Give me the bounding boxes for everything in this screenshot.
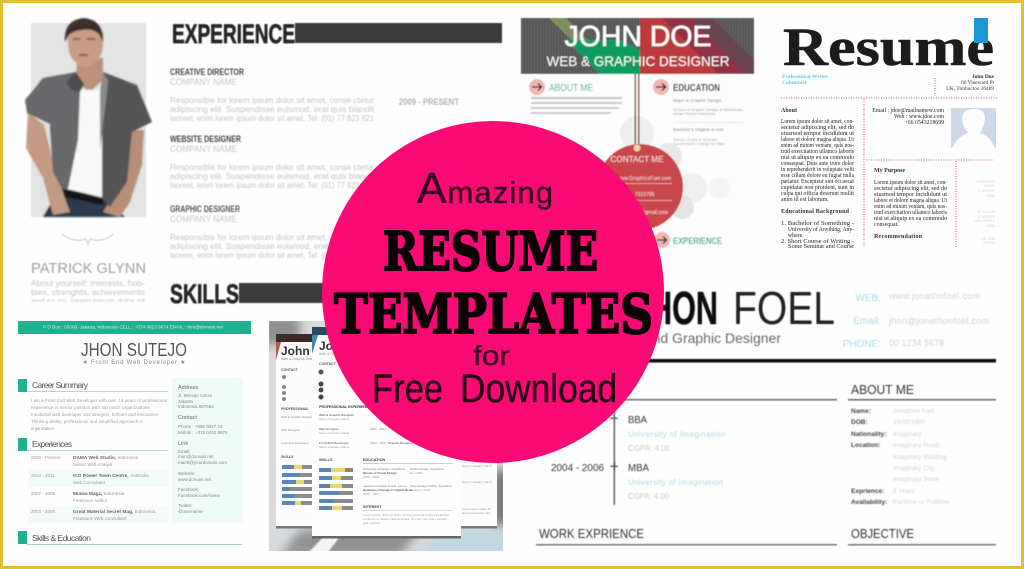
about column: University of Anything, Any- [788, 226, 854, 233]
side notes: RE MAJOR [977, 210, 995, 214]
about me: Name: [851, 408, 871, 415]
about column: eiusmod tempor incididunt ut [781, 131, 854, 137]
subtitle: Columnist [782, 80, 807, 86]
section: experiences: Freelance Web Consultant [73, 516, 127, 521]
experience entry: creative director [170, 67, 375, 123]
section: career summary: experience in senior position with top notch organizations. [31, 405, 151, 410]
photo: man in grey shirt [25, 18, 152, 217]
sidebar: address and links: Mobile : +372 0453 9876 [178, 430, 228, 435]
about column: trud exercitation ullamco laboris [781, 149, 855, 155]
contact block [946, 74, 995, 92]
education entry: BBA [628, 415, 725, 453]
contact block: 66 Vineward Pl [961, 80, 995, 86]
education block: Master of Visual Design [363, 471, 397, 475]
name: Jonathon Foel: FOEL [733, 282, 835, 334]
my purpose block: nisi ut aliquip ex ea commodo [874, 216, 947, 222]
side notes: WORK [984, 184, 996, 188]
contact links: www.jonathnfoel.com [888, 291, 980, 301]
sidebar: address and links: Facebook: [178, 487, 199, 492]
section: experiences: Experiences [32, 439, 72, 449]
sidebar: address and links: @username [178, 509, 203, 514]
section: experiences: DAMA Web Studio, Indonesia [73, 455, 139, 461]
back sheet: PROFESSIONAL [281, 407, 309, 411]
about me section [529, 79, 622, 114]
front sheet: Graphic Designer [388, 441, 414, 445]
sidebar: address and links: Jakarta [178, 399, 193, 404]
about column: pariatur. Excepteur sint occaecat [781, 179, 854, 185]
about text: bies, strenghts, achievements [31, 288, 145, 297]
sidebar: address and links: Phone : +966 0047 23 [178, 424, 223, 429]
heading bar: Experience [172, 19, 502, 49]
ornament [62, 234, 113, 244]
heading bar: Skills: SKILLS [170, 279, 239, 309]
experience entry: graphic designer: COMPANY NAME [170, 214, 237, 224]
education block: EDUCATION [363, 458, 386, 462]
headline: Templates: TEMPLATES [334, 282, 653, 346]
back sheet right notes: Some Company Name [462, 464, 493, 468]
education block: Course in 2006 [410, 488, 431, 492]
about column: 2. Short Course of Writing - [781, 238, 854, 245]
back sheet right notes: amet consectetur elit [462, 511, 490, 515]
sidebar: address and links: Facebook.com/name [178, 493, 221, 498]
email block: Web : www.jdoe.com [894, 114, 944, 120]
experience entry: graphic designer: GRAPHIC DESIGNER [170, 204, 240, 214]
section: experiences: Great Material Secret Mag, Indonesia [73, 509, 156, 515]
experience entry: graphic designer: Responsible for lorem ipsum dolor sit amet, conse ctetur [170, 233, 374, 242]
side notes: RE 2003 [981, 237, 995, 241]
section: career summary: organization. [31, 426, 55, 431]
sidebar: address and links: Twitter: [178, 503, 193, 508]
education block: Dec 2006 [410, 471, 423, 475]
about text [28, 279, 150, 310]
education block [363, 458, 453, 525]
sidebar: address and links: man@domain.net [178, 454, 214, 459]
sidebar: address and links: Website: [178, 471, 195, 476]
heading bar: Skills [170, 279, 369, 309]
back sheet: Web Designer [281, 428, 300, 432]
education section: School of Graphic Design & Multimedia [673, 107, 743, 112]
contact links [843, 291, 989, 350]
heading bar: Experience: EXPERIENCE [172, 19, 295, 49]
about column: enim ad minim veniam, quis nos- [781, 143, 854, 149]
education entry: MBA: CGPA: 4.00 [628, 492, 670, 501]
my purpose block: Recommendation [874, 234, 923, 240]
about me section: ABOUT ME [549, 83, 593, 94]
objective heading: OBJECTIVE [851, 526, 914, 541]
education section: Bachelor's Degree in Arts [673, 127, 724, 132]
my purpose block: consequat. [874, 222, 899, 228]
side notes: PREVIOUS [977, 180, 996, 184]
about column: anim id est laborum. [781, 197, 829, 203]
education section: School of Arts & Science [673, 137, 718, 142]
education section: Major in Graphic Design [673, 98, 722, 103]
my purpose block [874, 168, 948, 240]
dotted dividers [781, 78, 997, 247]
blurred backdrop [262, 315, 510, 556]
section: experiences: 2003 - 2006 [31, 509, 56, 514]
about column: consequat. Duis aute irure dolor [781, 161, 854, 167]
experience entry: creative director: laoreet, enim lorem ipsum dolor sit amet. Tel: (01) 77 823 821 [170, 114, 375, 123]
education block: quis nostrud [363, 521, 380, 525]
about column: culpa qui officia deserunt mollit [781, 190, 854, 197]
contact links: WEB: [855, 293, 881, 304]
about column: labore et dolore magna aliqua. Ut [781, 137, 854, 143]
education block: INTEREST [363, 505, 382, 509]
name: Jonathon Foel: HON [650, 282, 718, 334]
education entry: BBA: BBA [628, 415, 647, 426]
about column: Educational Background [781, 209, 850, 215]
side notes [974, 180, 996, 245]
experience entry: website designer: WEBSITE DESIGNER [170, 134, 241, 144]
about column: esse cillum dolore eu fugiat nulla [781, 172, 854, 179]
education block: Open Design Online, Anywhere [410, 484, 452, 488]
side notes: & DEGREE [977, 215, 996, 219]
section: experiences [18, 438, 168, 523]
my purpose block: enim ad minim veniam, quis nos- [874, 204, 947, 210]
education block: 2008 - 2009 [363, 475, 379, 479]
my purpose block: trud exercitation ullamco laboris [874, 210, 948, 216]
my purpose block: My Purpose [874, 168, 906, 174]
about column: 1. Bachelor of Something - [781, 220, 854, 227]
about me: ABOUT ME [851, 382, 914, 397]
about column: Some Seminar and Course [788, 244, 854, 250]
about column: nisi ut aliquip ex ea commodo [781, 155, 854, 161]
about me: DOB: [851, 419, 868, 426]
side notes: UNIVERSITY [974, 219, 996, 223]
front sheet: CONTACT [319, 362, 337, 366]
side notes: 2005 [987, 224, 995, 228]
experience entry: creative director: Responsible for lorem ipsum dolor sit amet, conse ctetur [170, 96, 374, 105]
sidebar: address and links: www.domain.net [178, 477, 212, 482]
about column [781, 108, 855, 250]
about me: Exprience: [851, 488, 884, 495]
front sheet: Some Company Name [319, 445, 350, 449]
about me: Location: [851, 442, 880, 449]
section: experiences: 2010 - 2011 [31, 473, 55, 478]
my purpose block: sectetur adipiscing elit, sed do [874, 186, 947, 192]
section: experiences: Senior Web Analyst [73, 462, 113, 467]
about column: About [781, 108, 797, 114]
education section: Urban Tourist University [673, 111, 715, 116]
side notes: COMPANY [978, 189, 996, 193]
sidebar: address and links: Address [178, 385, 198, 391]
experience entry: website designer: COMPANY NAME [170, 144, 237, 154]
my purpose block: labore et dolore magna aliqua. Ut [874, 198, 947, 204]
headline: for: for [473, 340, 510, 371]
section: career summary: Intuitional web developer and designer, brilliant and innovative. [31, 412, 159, 417]
header banner [521, 18, 754, 74]
section: experiences: Web Consultant [73, 480, 106, 485]
about me: 15/02/1980 [893, 419, 926, 426]
sidebar: address and links: Jl. Menuju Sukse [178, 393, 213, 398]
title: Resume: Resume [783, 17, 994, 77]
contact links: Email: [853, 316, 881, 327]
name: Jhon Sutejo: JHON SUTEJO [81, 340, 187, 360]
back sheet: CONTACT [281, 368, 299, 372]
panel: Jhon Sutejo resume [18, 321, 251, 545]
education entry: BBA: University of Imagination [628, 430, 725, 439]
panel: Patrick Glynn resume [25, 18, 502, 310]
experience entry: website designer: Responsible for lorem ipsum dolor sit amet, conse ctetur [170, 163, 374, 172]
front sheet: 2007 - 2012 [370, 427, 386, 431]
experience section: EXPERIENCE [673, 236, 722, 247]
about column: sectetur adipiscing elit, sed do [781, 125, 854, 131]
education entry: MBA: MBA [628, 463, 649, 474]
contact me badge: 7316785 [635, 192, 655, 198]
education block: ut labore et dolore magna aliqua. Ut enim ad minim veniam [363, 517, 448, 521]
back sheet right notes: Lorem ipsum dolor sit [462, 507, 491, 511]
front sheet: 2004 - 2006 [370, 441, 386, 445]
front sheet: PROFESSIONAL EXPERIENCE [319, 405, 371, 409]
blue tab [974, 18, 988, 43]
headline: Free Download: Download [460, 367, 617, 411]
about me: Imaginary State [893, 476, 939, 483]
avatar placeholder [951, 108, 996, 148]
about me: 8 Years [893, 488, 915, 495]
front sheet [312, 327, 461, 538]
back sheet: Front-End Developer [281, 441, 309, 445]
sidebar: address and links [172, 378, 243, 523]
sidebar: address and links: Link [178, 441, 188, 447]
my purpose block: Lorem ipsum dolor sit amet, con- [874, 180, 947, 186]
section: career summary: I am a Front End Web Developer with over 14 years of professional [31, 398, 167, 403]
front sheet: Some Company Name [319, 417, 350, 421]
subtitle: Professional Writer [782, 74, 829, 80]
pink circle callout [322, 121, 664, 463]
education block: Lakeview Institute of Arts, Lorem [363, 484, 407, 488]
back sheet right notes: Some Company Name [462, 480, 493, 484]
experience entry: graphic designer: adipiscing elit. Suspendisse euismod, erat quis blandit [170, 242, 375, 251]
sidebar: address and links: Indonesia 987654 [178, 404, 214, 409]
front sheet: John Smith [319, 339, 384, 353]
date: 2009 present: 2009 - PRESENT [399, 97, 459, 107]
education block: Lorem ipsum dolor sit amet, sed do eiusmod tempor incididunt [363, 513, 449, 517]
contact block: UK, Timbuctoo 26489 [946, 86, 994, 92]
section: experiences: 2007 - 2009 [31, 491, 56, 496]
email block: +66 6543218699 [904, 120, 944, 126]
section: career summary [18, 379, 168, 431]
contact me badge [597, 74, 730, 230]
experience entry: website designer: laoreet, enim lorem ipsum dolor sit amet. Tel: (01) 77 823 821 [170, 181, 375, 190]
about me: Imaginary [893, 431, 922, 438]
about column: Lorem ipsum dolor sit amet, con- [781, 119, 854, 125]
headline: Free Download: Free [372, 367, 443, 411]
contact links: jhon@jonathonfoel.com [888, 316, 989, 326]
about me: Jonathon Foel [893, 408, 935, 415]
side notes: EVENT [983, 241, 996, 245]
section: experiences: Minwa Magz, Indonesia [73, 491, 125, 497]
back sheet: Web & Graphic Designer [281, 357, 320, 361]
side notes: 2009 [987, 194, 995, 198]
experience entry: website designer: adipiscing elit. Suspendisse euismod, erat quis blandit [170, 172, 375, 181]
contact block: John Doe [972, 74, 995, 80]
section: experiences: 2020 - Present [31, 455, 61, 460]
about text: About yourself: interests, hob- [31, 279, 145, 288]
education section: Government College for Men [673, 141, 724, 146]
experience entry: creative director: CREATIVE DIRECTOR [170, 67, 244, 77]
work experience heading: WORK EXPRIENCE [539, 526, 644, 541]
back sheet [276, 334, 497, 528]
sidebar: address and links: Contact [178, 415, 197, 421]
headline: Amazing: Amazing [417, 164, 553, 213]
about me: Imaginary Building [893, 454, 947, 461]
subtitle [782, 74, 829, 86]
contact links: 00 1234 5678 [889, 338, 944, 348]
contact me badge: CONTACT ME [610, 154, 664, 164]
about me: Imaginary Road, [893, 442, 941, 449]
header banner: WEB & GRAPHIC DESIGNER [546, 53, 730, 69]
panel: John Doe resume [521, 18, 754, 248]
name: Jonathon Foel [650, 282, 835, 334]
section: experiences: ICO Power Town Centre, Australia [73, 473, 149, 479]
education entry: MBA [551, 463, 723, 501]
panel: overlapping sheets resume [262, 315, 510, 556]
about me: Availability: [851, 499, 887, 506]
about column: cupidatat non proident, sunt in [781, 185, 854, 191]
education entry: MBA: University of Imagination [628, 478, 723, 487]
section: skills and education [18, 531, 242, 545]
education block: 2005 - 2007 [363, 492, 379, 496]
education block: Online Design, Anywhere [410, 467, 444, 471]
front sheet: Web Designer [319, 427, 340, 431]
contact bar text: P O Box : 00000, Jakarta, Indonesia CELL : +374 0823 9874 EMAIL : hire@domain.net [43, 324, 224, 330]
about column: where. [788, 233, 804, 239]
skills bars [319, 458, 353, 510]
headline: Resume: RESUME [383, 221, 598, 283]
contact links: PHONE: [843, 339, 881, 350]
role: Web and Graphic Designer [612, 330, 781, 346]
about me: Nationality: [851, 431, 886, 438]
back sheet: SKILLS [281, 455, 294, 459]
experience entry: website designer [170, 134, 375, 190]
section: career summary: Career Summary [32, 380, 89, 390]
back sheet: Web & Graphic Designer [281, 415, 314, 419]
education block: University of Design, Anywhere [363, 467, 405, 471]
about me: Imaginary City, [893, 465, 936, 472]
section: experiences: Freelance Author [73, 498, 108, 503]
education section: EDUCATION [673, 83, 720, 94]
education header rule [600, 399, 837, 400]
experience entry: graphic designer: laoreet, enim lorem ipsum dolor sit amet. Tel: (01) 77 823 821 [170, 251, 375, 260]
about column: in reprehenderit in voluptate velit [781, 167, 854, 173]
skills bars: SKILLS [319, 458, 333, 462]
about me [848, 382, 996, 506]
email block [872, 108, 944, 126]
back sheet right notes [462, 464, 493, 515]
about text: and so on, lorem ipsum dolor sit [31, 297, 146, 306]
section: career summary: Thinking ability, professional and simplified approach in [31, 419, 144, 424]
sidebar: address and links: man9@yourdomain.com [178, 460, 227, 465]
about me: Parttime or Fulltime [893, 499, 950, 506]
education entry: MBA: 2004 - 2006 [551, 463, 604, 474]
panel: Resume newspaper template [775, 17, 1000, 256]
front sheet: Web & Graphic Designer [319, 352, 358, 356]
education block: Bachelor of Design in Digital Media [363, 488, 414, 492]
experience section [654, 232, 722, 248]
experience entry: creative director: COMPANY NAME [170, 77, 237, 87]
sidebar: address and links: Email: [178, 449, 191, 454]
header banner: JOHN DOE [564, 21, 712, 53]
email block: Email : jdoe@mailnamew.com [872, 108, 944, 114]
experience entry: graphic designer [170, 204, 375, 260]
my purpose block: eiusmod tempor incididunt ut [874, 192, 947, 198]
experience entry: creative director: adipiscing elit. Suspendisse euismod, erat quis blandit [170, 105, 375, 114]
front sheet: Front-End Developer [319, 441, 350, 445]
contact me badge: @gmail.com [640, 210, 668, 216]
job title: ★ Front End Web Developer ★ [82, 359, 186, 366]
education entry: BBA: CGPA: 4.00 [628, 444, 671, 453]
timeline [610, 405, 618, 505]
front sheet: Some Company Name [319, 431, 350, 435]
panel: Jonathon Foel resume [536, 282, 996, 546]
back sheet: John Smith [281, 344, 346, 358]
thick divider [600, 359, 996, 362]
name: Patrick Glynn: PATRICK GLYNN [31, 260, 146, 277]
education section [653, 79, 743, 146]
headline: Free Download [372, 367, 617, 411]
section: skills and education: Skills & Education [32, 533, 91, 543]
front sheet: Web & Graphic Designer [319, 413, 355, 417]
contact me badge: www.GraphicsFuel.com [617, 176, 671, 182]
